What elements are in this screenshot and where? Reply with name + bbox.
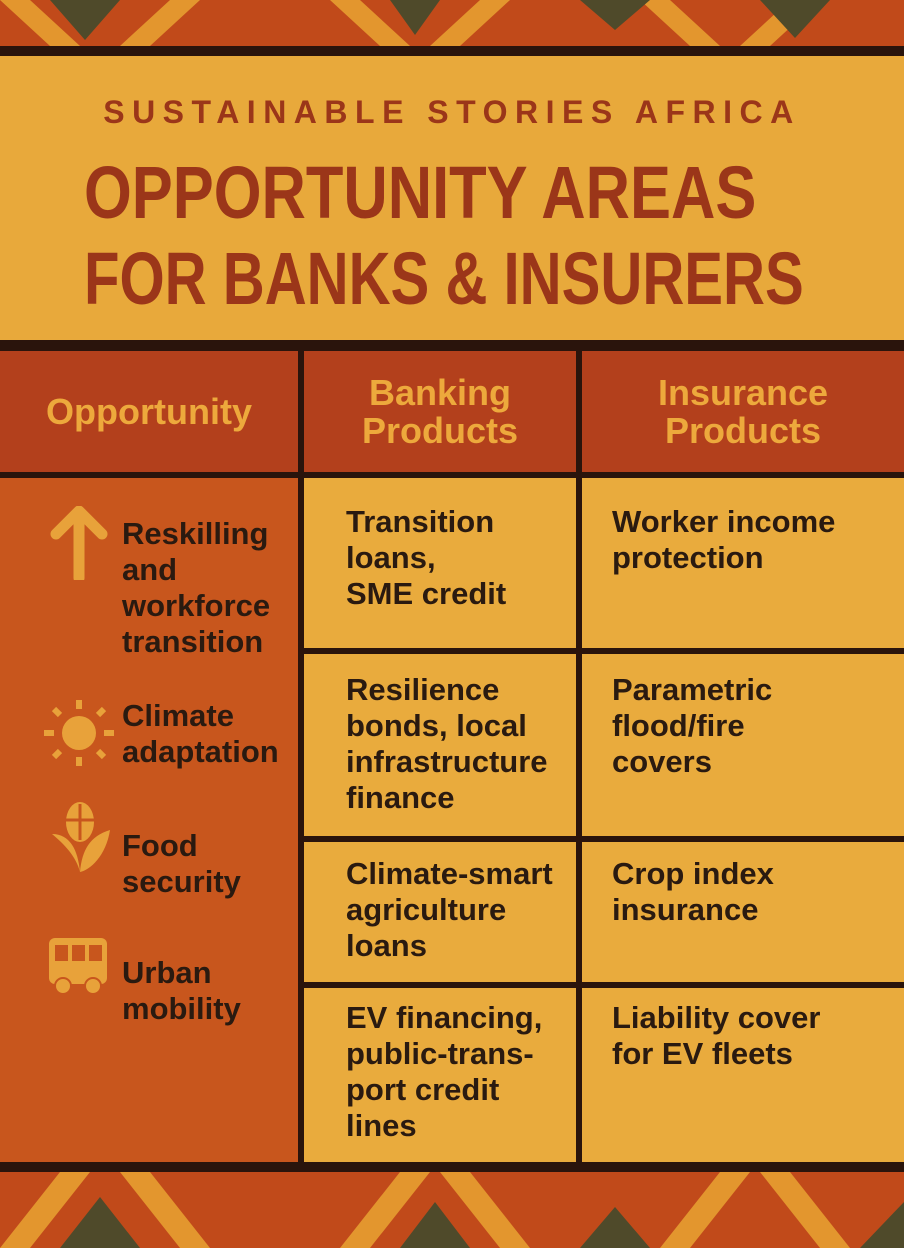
text: reskilling: transition <box>122 624 263 659</box>
row 1 insurance: protection <box>612 540 764 575</box>
row 3 banking <box>304 842 576 982</box>
row 3 insurance: Crop index <box>612 856 774 891</box>
text: climate: Climate <box>122 698 234 733</box>
text: reskilling: workforce <box>122 588 270 623</box>
text: climate <box>122 698 279 769</box>
header: banking: Banking <box>369 372 511 412</box>
subtitle: SUSTAINABLE STORIES AFRICA <box>103 94 801 130</box>
row 4 banking <box>304 988 576 1162</box>
icon: bus <box>49 938 107 993</box>
row 1 banking: SME credit <box>346 576 506 611</box>
opportunity column <box>0 478 298 1162</box>
row 2 insurance: flood/fire <box>612 708 745 743</box>
row 3 insurance: insurance <box>612 892 758 927</box>
text: urban: Urban <box>122 955 212 990</box>
text: food: Food <box>122 828 198 863</box>
icon: sun <box>44 700 114 766</box>
row 1 banking <box>304 478 576 648</box>
header: banking: Products <box>362 410 518 450</box>
row 4 banking: lines <box>346 1108 417 1143</box>
header: insurance <box>582 351 904 472</box>
main title line 2: FOR BANKS & INSURERS <box>84 237 804 320</box>
header: insurance: Insurance <box>658 372 828 412</box>
bottom pattern band <box>0 1172 904 1248</box>
row 4 insurance <box>582 988 904 1162</box>
row 3 banking: Climate-smart <box>346 856 553 891</box>
row 1 banking: loans, <box>346 540 436 575</box>
text: reskilling: and <box>122 552 177 587</box>
header: banking <box>304 351 576 472</box>
header: opportunity: Opportunity <box>46 390 252 432</box>
row 1 banking: Transition <box>346 504 494 539</box>
row 3 banking: agriculture <box>346 892 506 927</box>
row 3 banking: loans <box>346 928 427 963</box>
text: climate: adaptation <box>122 734 279 769</box>
row 3 insurance <box>582 842 904 982</box>
row 2 insurance: covers <box>612 744 712 779</box>
text: urban <box>122 955 241 1026</box>
row 1 insurance: Worker income <box>612 504 835 539</box>
row 1 insurance <box>582 478 904 648</box>
row 2 banking <box>304 654 576 836</box>
row 4 banking: port credit <box>346 1072 499 1107</box>
header: opportunity <box>0 351 298 472</box>
text: food <box>122 828 241 899</box>
icon: corn <box>52 802 110 872</box>
row 2 insurance: Parametric <box>612 672 772 707</box>
text: food: security <box>122 864 241 899</box>
text: urban: mobility <box>122 991 241 1026</box>
title panel <box>0 56 904 340</box>
row 4 insurance: Liability cover <box>612 1000 820 1035</box>
row 4 insurance: for EV fleets <box>612 1036 793 1071</box>
icon: arrow <box>50 506 108 580</box>
top pattern band <box>0 0 904 46</box>
text: reskilling <box>122 516 270 659</box>
row 2 banking: Resilience <box>346 672 499 707</box>
row 2 banking: bonds, local <box>346 708 527 743</box>
row 2 banking: finance <box>346 780 455 815</box>
text: reskilling: Reskilling <box>122 516 268 551</box>
header: insurance: Products <box>665 410 821 450</box>
main title line 1: OPPORTUNITY AREAS <box>84 151 756 234</box>
row 4 banking: EV financing, <box>346 1000 542 1035</box>
row 4 banking: public-trans- <box>346 1036 534 1071</box>
row 2 banking: infrastructure <box>346 744 548 779</box>
row 2 insurance <box>582 654 904 836</box>
